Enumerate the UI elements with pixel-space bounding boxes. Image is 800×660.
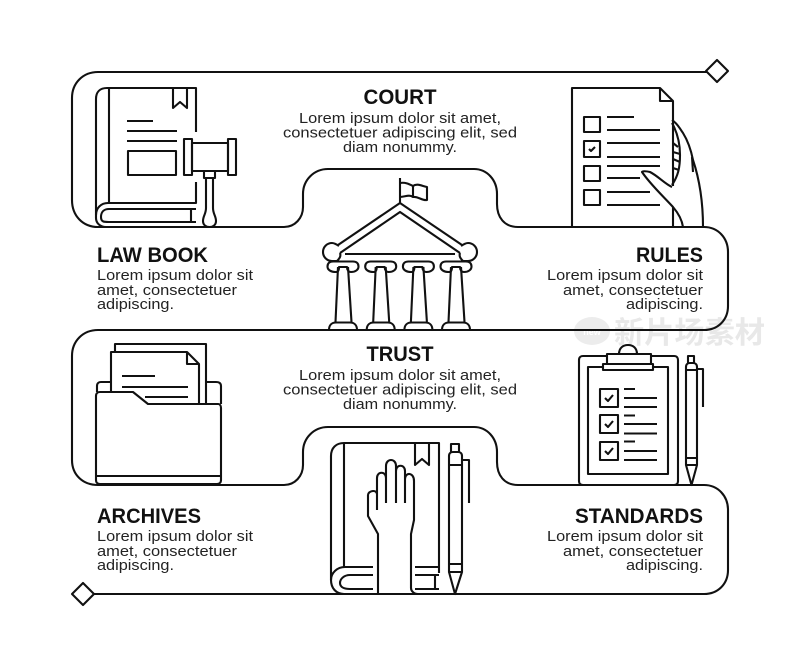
watermark: 新片场素材 <box>614 317 765 350</box>
text block: rules: Lorem ipsum dolor sit <box>547 267 704 284</box>
text block: rules <box>547 244 704 313</box>
text block: trust: diam nonummy. <box>343 396 457 413</box>
text block: law book: Lorem ipsum dolor sit <box>97 267 254 284</box>
column 3 <box>403 262 434 330</box>
icon: end diamond top <box>706 60 728 82</box>
column 4 <box>440 262 472 330</box>
text block: standards: STANDARDS <box>575 505 703 528</box>
text block: archives: ARCHIVES <box>97 505 201 528</box>
text block: archives: Lorem ipsum dolor sit <box>97 528 254 545</box>
text block: archives: amet, consectetuer <box>97 543 237 560</box>
text block: trust: consectetuer adipiscing elit, sed <box>283 382 517 398</box>
icon: courthouse temple with flag <box>323 178 477 330</box>
text block: court: consectetuer adipiscing elit, sed <box>283 124 517 142</box>
text block: standards <box>547 505 704 574</box>
text block: standards: adipiscing. <box>626 557 703 574</box>
icon: archive folder with documents <box>96 344 221 484</box>
text block: law book: LAW BOOK <box>97 244 208 267</box>
text block: rules: adipiscing. <box>626 296 703 313</box>
text block: law book: amet, consectetuer <box>97 282 237 299</box>
connector line <box>72 72 728 594</box>
icon: clipboard checklist <box>579 345 678 485</box>
icon: rules checklist held by hand <box>572 88 703 227</box>
text block: standards: amet, consectetuer <box>563 543 703 560</box>
text block: law book <box>97 244 254 313</box>
icon: start diamond bottom <box>72 583 94 605</box>
text block: rules: RULES <box>636 244 703 267</box>
text block: court <box>283 86 517 156</box>
icon: raised hand on book <box>331 443 439 594</box>
text block: court: Lorem ipsum dolor sit amet, <box>299 110 501 127</box>
icon: law book with gavel <box>96 88 236 227</box>
text block: court: diam nonummy. <box>343 139 457 156</box>
right scroll <box>460 243 477 261</box>
icon: pen beside clipboard <box>686 356 703 485</box>
column 2 <box>365 262 396 330</box>
left scroll <box>323 243 340 261</box>
text block: standards: Lorem ipsum dolor sit <box>547 528 704 545</box>
icon: pen beside book <box>449 444 469 594</box>
text block: trust: Lorem ipsum dolor sit amet, <box>299 367 501 384</box>
text block: archives <box>97 505 254 574</box>
column 1 <box>328 262 358 330</box>
text block: archives: adipiscing. <box>97 557 174 574</box>
text block: rules: amet, consectetuer <box>563 282 703 299</box>
watermark: new <box>583 327 602 337</box>
text block: law book: adipiscing. <box>97 296 174 313</box>
text block: trust <box>283 343 517 413</box>
text block: court: COURT <box>364 86 437 109</box>
text block: trust: TRUST <box>366 343 434 366</box>
